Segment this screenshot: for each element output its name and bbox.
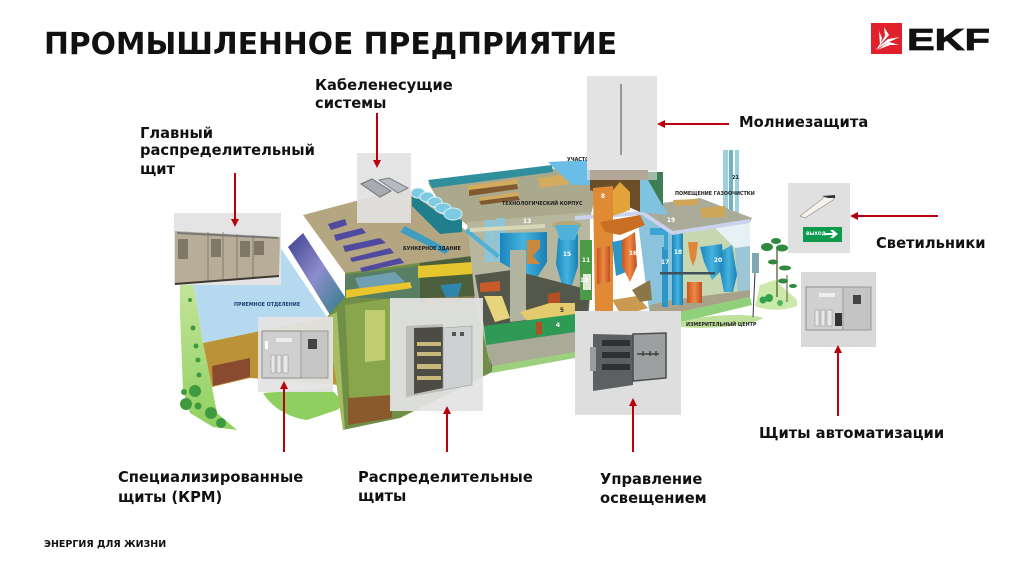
bunker roof with skylights xyxy=(303,188,480,273)
label: cable systems: системы xyxy=(315,95,386,112)
chimney stacks xyxy=(723,150,739,214)
gas cleaning room: ПОМЕЩЕНИЕ ГАЗООЧИСТКИ xyxy=(675,191,755,197)
arrow: lightning protection xyxy=(659,123,729,125)
gas cleaning room: 19 xyxy=(667,217,675,224)
solar roof slope xyxy=(288,233,345,315)
label: distribution boards: Распределительные xyxy=(358,469,533,486)
panel: automation cabinet photo xyxy=(801,272,876,347)
process hall: blue bunkers: 13 xyxy=(523,218,531,225)
reception hall: ПРИЕМНОЕ ОТДЕЛЕНИЕ xyxy=(234,302,300,308)
tower label: УЧАСТОК ОБРАБОТКИ xyxy=(567,157,629,163)
panel: luminaires photo xyxy=(788,183,850,253)
plant base and lawn: ИЗМЕРИТЕЛЬНЫЙ ЦЕНТР xyxy=(686,320,757,328)
label: specialized boards: Специализированные xyxy=(118,469,303,486)
arrow: cable systems xyxy=(376,113,378,166)
reception hall xyxy=(193,247,345,430)
label: main distribution board: Главный xyxy=(140,125,213,142)
main hall roof and fans: ТЕХНОЛОГИЧЕСКИЙ КОРПУС xyxy=(502,199,583,207)
plant base and lawn xyxy=(680,253,797,328)
chimney stacks: 21 xyxy=(732,175,739,181)
label: lightning protection: Молниезащита xyxy=(739,114,868,131)
bunker roof with skylights: БУНКЕРНОЕ ЗДАНИЕ xyxy=(403,246,461,252)
label: distribution boards: щиты xyxy=(358,488,406,505)
machinery level xyxy=(475,270,590,372)
gas cleaning room xyxy=(575,191,755,318)
label: automation boards: Щиты автоматизации xyxy=(759,425,944,442)
process hall: blue bunkers: 5 xyxy=(560,307,564,314)
industrial plant cutaway illustration xyxy=(180,150,797,430)
label: main distribution board: щит xyxy=(140,161,176,178)
gas cleaning room: 20 xyxy=(714,257,722,264)
arrow: distribution boards xyxy=(446,408,448,452)
panel: lightning protection photo xyxy=(587,76,657,180)
furnace tower xyxy=(548,160,668,316)
panel: distribution board photo xyxy=(390,298,483,411)
furnace tower: 11 xyxy=(582,257,590,264)
label: luminaires: Светильники xyxy=(876,235,986,252)
arrow: automation boards xyxy=(837,347,839,416)
panel: lighting control photo xyxy=(575,311,681,415)
logo: EKF xyxy=(871,22,990,57)
gas cleaning room: 18 xyxy=(674,249,682,256)
label: lighting control: освещением xyxy=(600,490,707,507)
logo: EKF: EKF xyxy=(907,22,990,57)
arrow: lighting control xyxy=(632,400,634,452)
gas cleaning room: 17 xyxy=(661,259,669,266)
left lawn strip xyxy=(180,280,237,430)
process hall: blue bunkers: 15 xyxy=(563,251,571,258)
arrow: luminaires xyxy=(852,215,938,217)
process hall: blue bunkers xyxy=(465,212,592,373)
process hall: blue bunkers: 14 xyxy=(515,252,523,259)
slogan: ЭНЕРГИЯ ДЛЯ ЖИЗНИ xyxy=(44,539,166,550)
furnace tower: 12 xyxy=(580,277,588,284)
title: ПРОМЫШЛЕННОЕ ПРЕДПРИЯТИЕ xyxy=(44,27,617,62)
panel: specialized switchboard photo xyxy=(258,317,333,392)
arrow: main board xyxy=(234,173,236,225)
main hall roof and fans xyxy=(411,165,600,234)
label: lighting control: Управление xyxy=(600,471,702,488)
furnace tower: 8 xyxy=(601,193,605,200)
trees on the left xyxy=(180,298,226,428)
label: main distribution board: распределительный xyxy=(140,142,315,159)
label: specialized boards: щиты (КРМ) xyxy=(118,489,222,506)
exit sign: ВЫХОД xyxy=(806,231,826,237)
process hall: blue bunkers: 4 xyxy=(556,322,560,329)
label: cable systems: Кабеленесущие xyxy=(315,77,453,94)
bunker building body xyxy=(327,252,585,430)
tree xyxy=(760,238,797,306)
arrow: specialized boards xyxy=(283,383,285,452)
panel: main switchboard photo xyxy=(174,213,281,285)
furnace tower: 16 xyxy=(629,250,637,257)
panel: cable tray photo xyxy=(357,153,411,223)
